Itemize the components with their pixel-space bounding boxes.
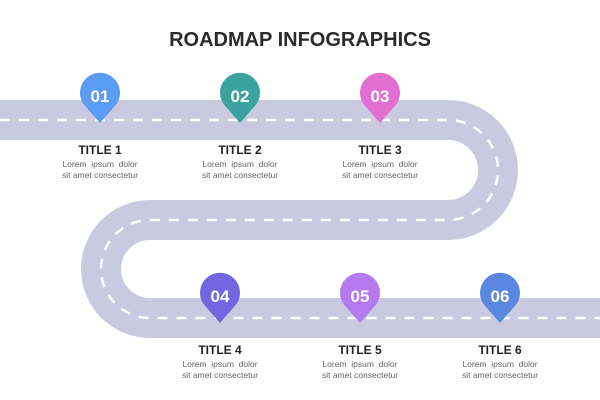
text 1 (62, 143, 138, 180)
text 2: TITLE 2 (218, 143, 262, 157)
text 6: Lorem ipsum dolor (462, 359, 538, 369)
text 1: Lorem ipsum dolor (62, 159, 138, 169)
text 2 (202, 143, 278, 180)
pin 04: 04 (211, 287, 230, 306)
text 6: sit amet consectetur (462, 370, 538, 380)
text 2: Lorem ipsum dolor (202, 159, 278, 169)
text 4: Lorem ipsum dolor (182, 359, 258, 369)
text 1: sit amet consectetur (62, 170, 138, 180)
pin 05 (340, 273, 380, 323)
text 1: TITLE 1 (78, 143, 122, 157)
text 5: TITLE 5 (338, 343, 382, 357)
pin 03 (360, 73, 400, 123)
pin 01: 01 (91, 87, 109, 106)
title: ROADMAP INFOGRAPHICS (169, 29, 431, 51)
text 6: TITLE 6 (478, 343, 522, 357)
pin 02: 02 (231, 87, 249, 106)
road (0, 120, 600, 318)
text 3 (342, 143, 418, 180)
pin 06: 06 (491, 287, 509, 306)
pin 03: 03 (371, 87, 389, 106)
pin 01 (80, 73, 120, 123)
text 6 (462, 343, 538, 380)
pin 05: 05 (351, 287, 369, 306)
text 4 (182, 343, 258, 380)
text 3: TITLE 3 (358, 143, 402, 157)
text 5 (322, 343, 398, 380)
text 4: TITLE 4 (198, 343, 242, 357)
text 5: sit amet consectetur (322, 370, 398, 380)
text 4: sit amet consectetur (182, 370, 258, 380)
text 3: Lorem ipsum dolor (342, 159, 418, 169)
text 5: Lorem ipsum dolor (322, 359, 398, 369)
pin 04 (200, 273, 240, 323)
pin 02 (220, 73, 260, 123)
pin 06 (480, 273, 520, 323)
text 2: sit amet consectetur (202, 170, 278, 180)
text 3: sit amet consectetur (342, 170, 418, 180)
